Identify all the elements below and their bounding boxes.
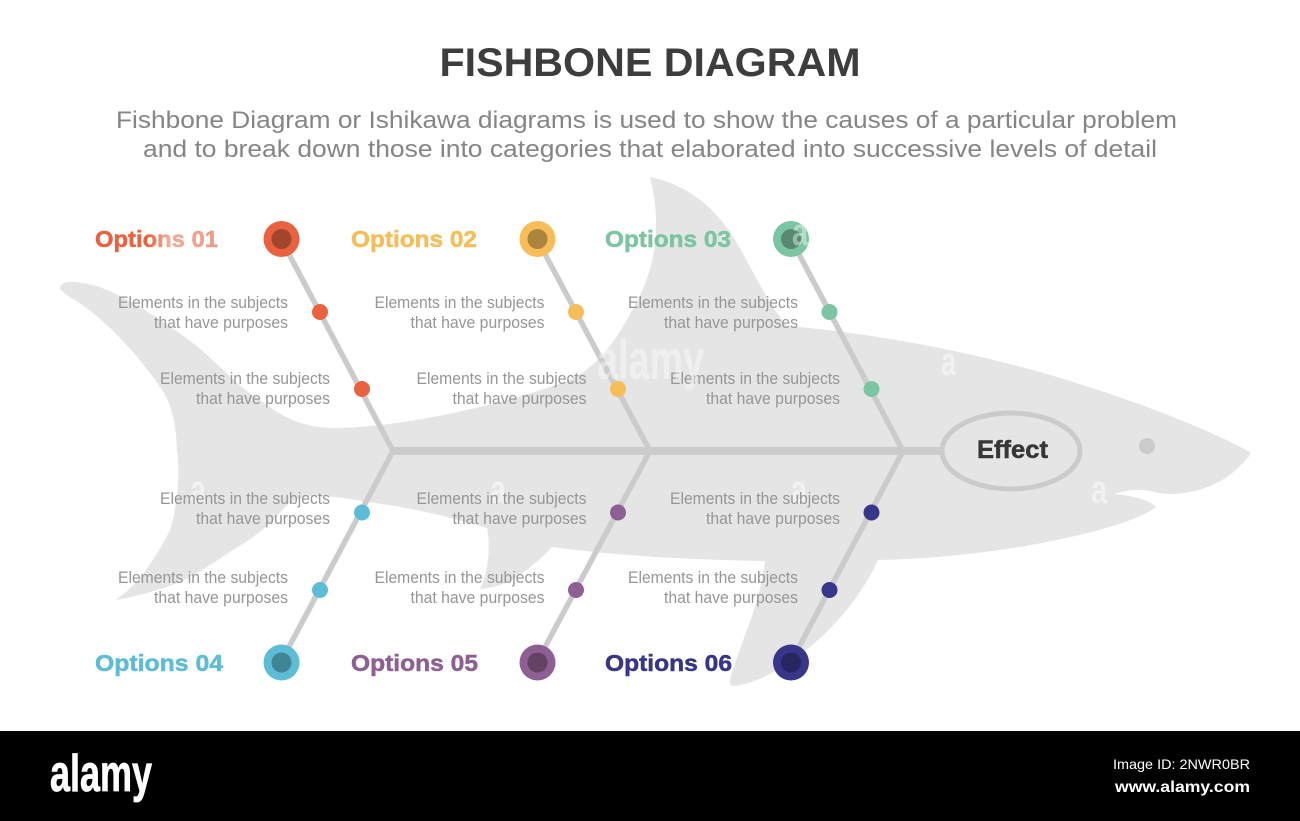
option 05: Options 05 [351, 650, 478, 676]
option 04: that have purposes [196, 510, 330, 528]
option 01: that have purposes [154, 314, 288, 332]
option 05: that have purposes [452, 510, 586, 528]
option 01 [95, 221, 370, 408]
watermark overlay: a [792, 212, 809, 254]
option 03: Options 03 [605, 226, 731, 252]
option 06: that have purposes [706, 510, 840, 528]
option 01: that have purposes [196, 390, 330, 408]
option 04: Elements in the subjects [160, 490, 330, 508]
option 01: Elements in the subjects [118, 294, 288, 312]
fishbone spine [393, 447, 945, 455]
watermark marks: a [791, 468, 808, 512]
option 02: that have purposes [452, 390, 586, 408]
option 06: Elements in the subjects [628, 569, 798, 587]
footer bar: www.alamy.com [1114, 779, 1250, 796]
watermark marks: a [1091, 468, 1108, 512]
option 05 [351, 490, 626, 680]
option 06 [605, 490, 880, 680]
shark silhouette background [60, 177, 1250, 686]
subtitle [116, 107, 1177, 163]
watermark overlay [597, 212, 809, 391]
watermark overlay: alamy [597, 328, 704, 391]
watermark marks: a [490, 468, 507, 512]
option 05: that have purposes [410, 589, 544, 607]
option 03: Elements in the subjects [628, 294, 798, 312]
subtitle: Fishbone Diagram or Ishikawa diagrams is used to show the causes of a particular problem [116, 107, 1177, 134]
option 03 [605, 221, 880, 408]
title: FISHBONE DIAGRAM [440, 41, 860, 85]
option 04: Elements in the subjects [118, 569, 288, 587]
option 06: that have purposes [664, 589, 798, 607]
option 02: Options 02 [351, 226, 477, 252]
watermark marks [190, 340, 1108, 512]
option 03: that have purposes [664, 314, 798, 332]
effect head: Effect [977, 436, 1049, 464]
footer bar: Image ID: 2NWR0BR [1113, 756, 1250, 772]
option 02: Elements in the subjects [374, 294, 544, 312]
option 06: Options 06 [605, 650, 732, 676]
option 06: Elements in the subjects [670, 490, 840, 508]
option 02: that have purposes [410, 314, 544, 332]
watermark marks: a [941, 340, 957, 384]
shark eye [1139, 438, 1155, 454]
option 05: Elements in the subjects [416, 490, 586, 508]
option 01: Options 01 [95, 226, 218, 252]
option 03: that have purposes [706, 390, 840, 408]
option 05: Elements in the subjects [374, 569, 544, 587]
footer bar: alamy [50, 745, 152, 803]
diagonal bones [281, 239, 903, 662]
effect head [942, 413, 1080, 489]
footer bar [0, 731, 1300, 821]
option 01: Elements in the subjects [160, 370, 330, 388]
option 02 [351, 221, 626, 408]
option 03: Elements in the subjects [670, 370, 840, 388]
option 04: that have purposes [154, 589, 288, 607]
subtitle: and to break down those into categories that elaborated into successive levels of detail [143, 136, 1157, 163]
option 02: Elements in the subjects [416, 370, 586, 388]
watermark marks: a [190, 468, 207, 512]
option 04 [95, 490, 370, 680]
option 04: Options 04 [95, 650, 223, 676]
